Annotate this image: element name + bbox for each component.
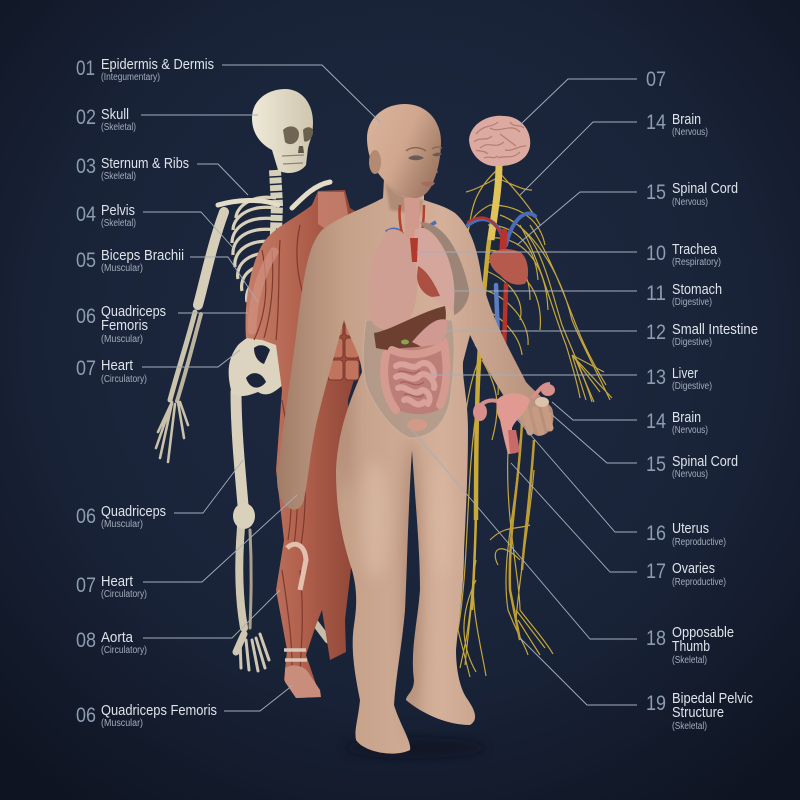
text 02: Skull xyxy=(101,107,129,123)
right ovary xyxy=(541,384,555,396)
text 06 upper xyxy=(76,304,166,345)
text 10: 10 xyxy=(646,242,666,265)
text 03 xyxy=(76,155,189,182)
text 02: 02 xyxy=(76,106,96,129)
text 04: 04 xyxy=(76,203,96,226)
body silhouette xyxy=(277,178,553,754)
leader 10 xyxy=(417,251,637,253)
label 06 quadriceps femoris upper xyxy=(76,304,248,345)
pleura band xyxy=(420,222,469,315)
uterus body xyxy=(497,393,530,454)
text 08: Aorta xyxy=(101,630,134,646)
text 17 xyxy=(646,560,726,588)
leader 01 xyxy=(222,65,381,123)
vessels red xyxy=(400,205,424,262)
hand fingers xyxy=(525,408,550,432)
large intestine xyxy=(384,344,447,410)
text 06 upper: 06 xyxy=(76,305,96,328)
text 13: Liver xyxy=(672,366,698,382)
label 14 brain upper xyxy=(520,111,708,195)
label 17 ovaries xyxy=(511,463,726,588)
text 05: (Muscular) xyxy=(101,263,143,274)
lung right side of image xyxy=(414,228,454,310)
leader 16 xyxy=(515,417,637,532)
text 10: (Respiratory) xyxy=(672,257,721,268)
leader 11 xyxy=(452,290,637,292)
text 07 upper xyxy=(76,357,147,385)
text 14 lower: Brain xyxy=(672,410,701,426)
text 03: 03 xyxy=(76,155,96,178)
text 07 upper: Heart xyxy=(101,358,133,374)
label 12 small intestine xyxy=(445,321,758,348)
leader 13 xyxy=(430,374,637,376)
leader 15 lower xyxy=(550,413,637,463)
label 03 sternum xyxy=(76,155,248,195)
label 01 epidermis xyxy=(76,57,381,123)
leader 06 lower xyxy=(174,460,243,513)
label 04 pelvis xyxy=(76,203,235,250)
leader 07 right xyxy=(520,79,637,125)
label 14 brain lower xyxy=(552,402,708,436)
foot xyxy=(285,665,321,698)
text 13: 13 xyxy=(646,366,666,389)
text 19: 19 xyxy=(646,692,666,715)
leader 04 xyxy=(143,212,235,250)
text 03: (Skeletal) xyxy=(101,171,136,182)
text 19: Structure xyxy=(672,705,724,721)
text 06 bottom: 06 xyxy=(76,704,96,727)
intestine mass xyxy=(383,340,448,414)
face features xyxy=(406,147,442,187)
leader 06 upper xyxy=(178,312,248,314)
text 15 upper: Spinal Cord xyxy=(672,181,738,197)
spinal cord lower root xyxy=(472,500,476,610)
text 19: Bipedal Pelvic xyxy=(672,691,753,707)
text 06 upper: Quadriceps xyxy=(101,304,166,320)
text 05 xyxy=(76,248,184,274)
text 11: 11 xyxy=(646,282,666,305)
text 06 lower: 06 xyxy=(76,505,96,528)
biceps highlight xyxy=(252,252,274,330)
leader 06 bottom xyxy=(224,685,293,711)
leader 07 upper xyxy=(142,350,240,367)
text 18 xyxy=(646,625,734,666)
text 07 upper: (Circulatory) xyxy=(101,374,147,385)
number 07 right: 07 xyxy=(646,68,666,91)
skeleton legs xyxy=(236,392,328,640)
text 07 lower xyxy=(76,574,147,600)
text 11: (Digestive) xyxy=(672,297,712,308)
fallopian tubes xyxy=(476,384,550,412)
text 10: Trachea xyxy=(672,242,718,258)
muscle fibres xyxy=(254,225,320,670)
muscle body xyxy=(246,190,360,698)
text 12: Small Intestine xyxy=(672,322,758,338)
leader 05 xyxy=(190,257,258,302)
label 15 spinal cord lower xyxy=(550,413,738,480)
text 02: (Skeletal) xyxy=(101,122,136,133)
text 14 lower xyxy=(646,410,708,436)
leader 12 xyxy=(445,330,637,332)
body shading xyxy=(337,392,427,711)
text 01: Epidermis & Dermis xyxy=(101,57,214,73)
label 15 spinal cord upper xyxy=(517,181,738,245)
text 14 lower: (Nervous) xyxy=(672,425,708,436)
clavicle and shoulder xyxy=(218,182,330,208)
spinal cord xyxy=(476,162,499,520)
text 05: 05 xyxy=(76,249,96,272)
label 18 opposable thumb xyxy=(412,430,734,666)
abdominal muscle blocks xyxy=(328,318,359,380)
label 07 heart lower xyxy=(76,495,297,600)
text 04: Pelvis xyxy=(101,203,135,219)
figure: skeleton xyxy=(156,89,330,671)
text 13: (Digestive) xyxy=(672,381,712,392)
lung left side of image xyxy=(369,229,417,330)
text 14 upper: Brain xyxy=(672,112,701,128)
text 16: (Reproductive) xyxy=(672,537,726,548)
stomach xyxy=(412,319,447,349)
text 03: Sternum & Ribs xyxy=(101,156,189,172)
text 06 bottom xyxy=(76,703,217,729)
label 05 biceps xyxy=(76,248,258,302)
text 06 upper: (Muscular) xyxy=(101,334,143,345)
text 07 lower: Heart xyxy=(101,574,133,590)
bladder xyxy=(407,419,427,431)
figure: nervous and circulatory system xyxy=(458,116,612,677)
text 11: Stomach xyxy=(672,282,722,298)
left labels xyxy=(76,57,381,729)
label 02 skull xyxy=(76,106,258,133)
foot bones xyxy=(236,634,269,671)
text 06 bottom: (Muscular) xyxy=(101,718,143,729)
head xyxy=(367,104,441,198)
small intestine xyxy=(396,363,434,405)
text 16: Uterus xyxy=(672,521,709,537)
text 12: 12 xyxy=(646,321,666,344)
label 08 aorta xyxy=(76,590,280,656)
figure: uterus and ovaries xyxy=(473,384,555,454)
leader 07 lower xyxy=(143,495,297,582)
label 11 stomach xyxy=(452,282,722,308)
text 05: Biceps Brachii xyxy=(101,248,184,264)
text 18: 18 xyxy=(646,627,666,650)
label 06 quadriceps femoris bottom xyxy=(76,685,293,729)
abdominal window xyxy=(363,320,454,438)
knee xyxy=(233,503,255,529)
trachea xyxy=(404,198,420,245)
right leg main nerve xyxy=(510,420,534,640)
nerve network xyxy=(458,170,612,677)
label 16 uterus xyxy=(515,417,726,548)
text 07 lower: 07 xyxy=(76,574,96,597)
text 12: (Digestive) xyxy=(672,337,712,348)
text 08: 08 xyxy=(76,629,96,652)
leader 18 xyxy=(412,430,637,639)
text 06 lower: Quadriceps xyxy=(101,504,166,520)
text 08 xyxy=(76,629,147,656)
text 14 upper: (Nervous) xyxy=(672,127,708,138)
text 02 xyxy=(76,106,136,133)
text 17: (Reproductive) xyxy=(672,577,726,588)
text 17: Ovaries xyxy=(672,561,715,577)
text 06 lower: (Muscular) xyxy=(101,519,143,530)
text 15 lower: (Nervous) xyxy=(672,469,708,480)
text 08: (Circulatory) xyxy=(101,645,147,656)
intestine folds xyxy=(398,370,424,397)
cervix xyxy=(508,430,520,454)
vessels at neck xyxy=(386,222,436,245)
arm bones xyxy=(170,212,224,401)
text 06 bottom: Quadriceps Femoris xyxy=(101,703,217,719)
text 18: (Skeletal) xyxy=(672,655,707,666)
spinal cord upper highlight xyxy=(491,164,499,240)
figure: skin body with organs xyxy=(277,104,553,758)
text 19 xyxy=(646,691,753,732)
text 07 lower: (Circulatory) xyxy=(101,589,147,600)
pelvis xyxy=(229,331,292,396)
text 06 lower xyxy=(76,504,166,530)
label 06 quadriceps lower xyxy=(76,460,243,530)
right labels xyxy=(412,68,758,732)
text 07 upper: 07 xyxy=(76,357,96,380)
leader 03 xyxy=(197,164,248,195)
gall bladder xyxy=(401,340,409,344)
text 15 lower xyxy=(646,453,738,480)
text 04: (Skeletal) xyxy=(101,218,136,229)
text 19: (Skeletal) xyxy=(672,721,707,732)
text 14 upper xyxy=(646,111,708,138)
brain xyxy=(469,116,530,166)
text 01: 01 xyxy=(76,57,95,80)
spine xyxy=(272,170,277,340)
text 14 upper: 14 xyxy=(646,111,666,134)
text 14 lower: 14 xyxy=(646,410,666,433)
label 07 right top xyxy=(520,68,666,125)
ovary nodule xyxy=(535,397,549,407)
text 18: Thumb xyxy=(672,639,710,655)
leader 02 xyxy=(141,114,258,116)
text 17: 17 xyxy=(646,560,666,583)
floor shadow xyxy=(345,738,485,758)
leader 19 xyxy=(520,638,637,705)
rib cage xyxy=(232,197,276,310)
liver xyxy=(374,306,446,350)
ankle wrap xyxy=(284,650,307,660)
skull xyxy=(252,89,313,173)
figure: muscular system xyxy=(246,190,360,698)
text 16: 16 xyxy=(646,522,666,545)
leader 17 xyxy=(511,463,637,572)
text 15 lower: Spinal Cord xyxy=(672,454,738,470)
text 13 xyxy=(646,366,712,392)
text 15 upper xyxy=(646,181,738,208)
neck shadow xyxy=(385,182,423,215)
heart xyxy=(489,249,528,285)
label 13 liver xyxy=(430,366,712,392)
text 11 xyxy=(646,282,722,308)
left ovary xyxy=(473,403,487,421)
arteries and veins xyxy=(468,214,535,385)
leader 14 lower xyxy=(552,402,637,420)
text 12 xyxy=(646,321,758,348)
ear xyxy=(369,150,381,174)
leader 08 xyxy=(143,590,280,638)
shin tendon xyxy=(287,544,306,590)
text 10 xyxy=(646,242,721,268)
hand bones xyxy=(156,402,188,462)
label 07 heart upper xyxy=(76,350,240,385)
text 18: Opposable xyxy=(672,625,734,641)
text 06 upper: Femoris xyxy=(101,318,148,334)
text 15 upper: 15 xyxy=(646,181,666,204)
text 01: (Integumentary) xyxy=(101,72,160,83)
collar muscle xyxy=(318,192,348,232)
text 16 xyxy=(646,521,726,548)
text 15 lower: 15 xyxy=(646,453,666,476)
aorta xyxy=(410,238,418,262)
leader 15 upper xyxy=(517,192,637,245)
leader 14 upper xyxy=(520,122,637,195)
text 01 xyxy=(76,57,214,83)
label 19 bipedal pelvic structure xyxy=(520,638,753,732)
pelvic openings xyxy=(246,345,270,388)
heart xyxy=(417,266,440,297)
label 10 trachea xyxy=(417,242,721,268)
text 15 upper: (Nervous) xyxy=(672,197,708,208)
text 04 xyxy=(76,203,136,229)
